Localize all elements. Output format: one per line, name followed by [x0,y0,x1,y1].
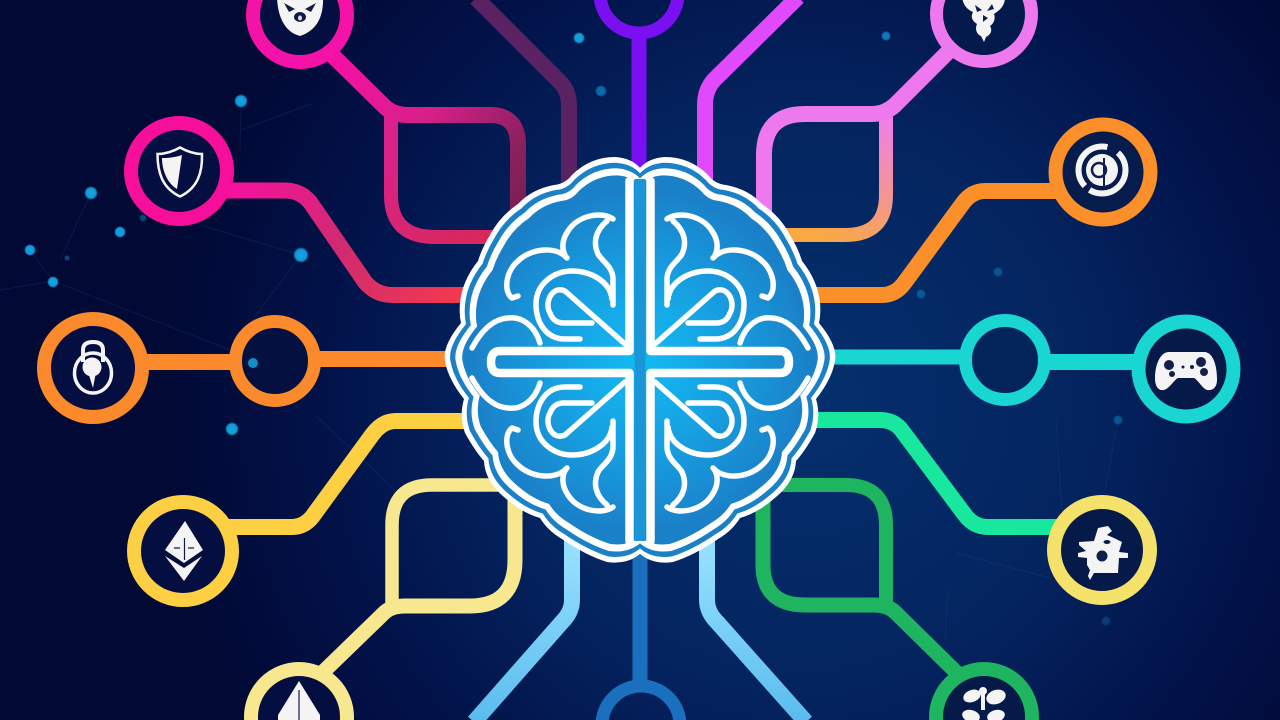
connector: bright green [795,420,1065,527]
quadrant: top right folds [655,215,808,348]
central brain [445,157,835,563]
connector: orange left outer [130,354,240,370]
node: bottom blue ring [602,686,680,720]
node: top purple ring [600,0,678,33]
connector: pale yellow branch [392,485,520,612]
node: small orange ring [236,322,314,400]
node: ethereum pale [251,669,347,720]
right hemisphere frame [650,181,808,541]
node: mask [253,0,347,62]
icon: ethereum yellow node [165,521,203,581]
central channel [634,179,646,541]
connector: bottom left blue [474,530,572,720]
connector: peach branch [760,108,886,235]
connector: top left maroon [476,0,569,190]
connector: bottom centre blue [632,540,648,690]
connector: orange right [790,191,1065,295]
icon: machine [1078,526,1128,580]
node: game controller [1138,322,1234,416]
icon: swirl [1078,146,1126,194]
connector: dark green branch [760,485,886,612]
icon: game controller [1155,352,1217,390]
connector: yellow left [225,421,490,527]
connector: teal outer [1045,354,1140,370]
node: shield [131,123,227,219]
small dot inside orange ring [248,358,258,368]
brain fold lines [472,181,808,541]
icon: shield [158,148,202,196]
node: green flower [936,669,1032,720]
node: orange swirl [1056,124,1150,220]
icon: lock [74,342,112,393]
node: pink burst [936,0,1032,62]
icon: flower [961,687,1008,720]
network background dots [0,31,1123,640]
connector: teal inner [805,350,965,364]
connector: top right violet [705,0,798,190]
connector: pink right [764,45,955,235]
connector lines [130,0,1140,720]
brain inner white contour [455,168,825,552]
node: lock [44,319,142,417]
connector: shield line [215,190,490,295]
connector: bottom right blue [707,530,806,720]
connector: top centre purple [632,35,646,185]
connector: top-left magenta branch [391,110,520,237]
node: ethereum yellow [134,502,232,600]
connector: pale yellow [320,490,515,675]
node: yellow machine [1054,502,1150,598]
icon: ethereum pale node [278,681,320,720]
node: small teal ring [966,320,1044,400]
brain fill [462,175,818,544]
brain outer white contour [445,157,835,563]
icon: mask [277,0,323,36]
connector: top-left magenta [325,48,518,240]
connector: dark green [763,490,960,676]
brain blue band [450,163,830,557]
connector: orange left inner [310,351,470,367]
icon: burst [962,0,1005,42]
